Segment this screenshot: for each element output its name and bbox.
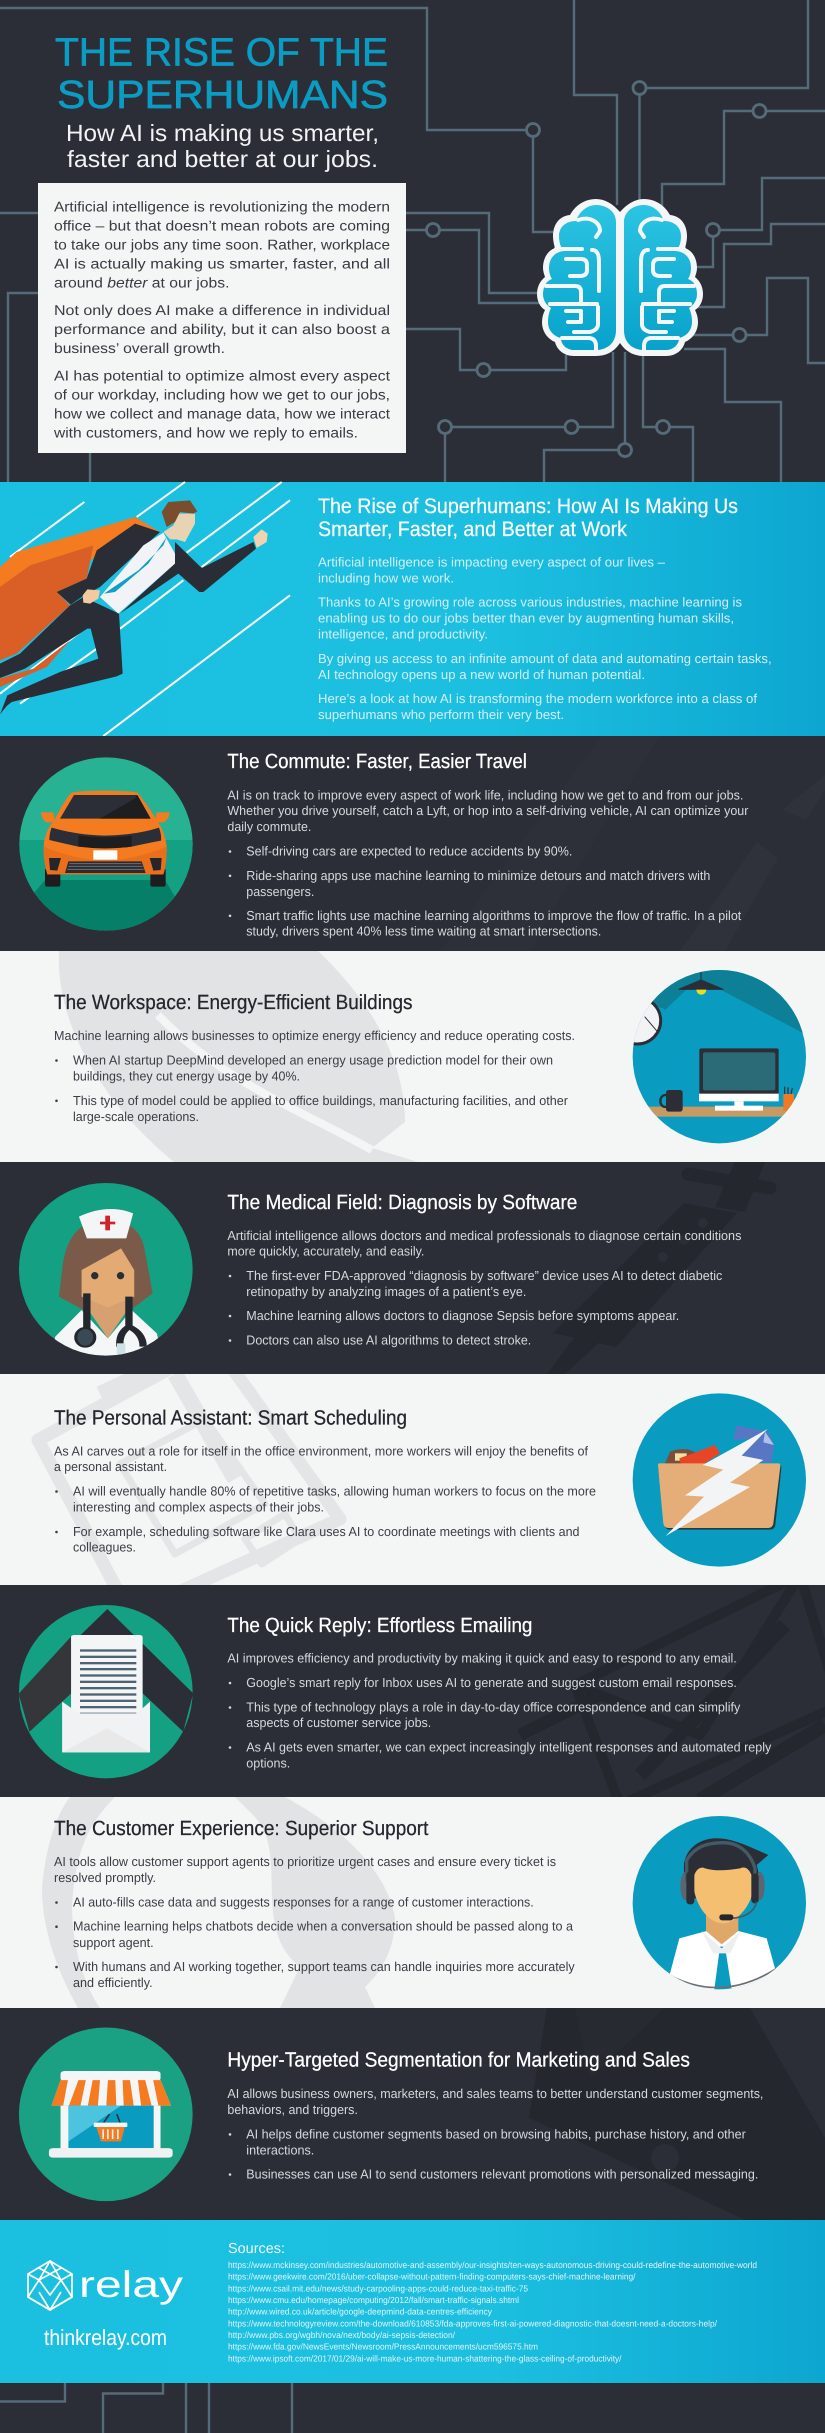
bullet list: AI helps define customer segments based on browsing habits, purchase history, and other [246,2126,746,2141]
body text: AI technology opens up a new world of human potential. [318,667,645,682]
bullet list [229,844,742,938]
body text: including how we work. [318,570,454,586]
title: THE RISE OF THE [55,30,388,74]
heading: Hyper-Targeted Segmentation for Marketing and Sales [227,2048,690,2072]
body text [227,2086,763,2117]
panel: hyper-targeted segmentation [0,2008,825,2220]
intro text panel: office – but that doesn’t mean robots are coming [54,218,390,234]
body text: AI tools allow customer support agents to prioritize urgent cases and ensure every ticket is [54,1854,556,1869]
bullet list: AI will eventually handle 80% of repetitive tasks, allowing human workers to focus on the more [73,1484,596,1498]
intro text panel: around better at our jobs. [54,276,229,292]
body text: AI improves efficiency and productivity by making it quick and easy to respond to any email. [227,1650,737,1666]
panel: the personal assistant [0,1329,825,1614]
bullet list [229,2126,758,2182]
website address: thinkrelay.com [44,2325,167,2350]
body text: As AI carves out a role for itself in the office environment, more workers will enjoy the benefits of [54,1444,588,1458]
bullet list: interesting and complex aspects of their jobs. [73,1500,324,1514]
circuit board traces [0,0,825,482]
sources list: https://www.ipsoft.com/2017/01/29/ai-will-make-us-more-human-shattering-the-glass-ceiling-of-productivity/ [228,2353,622,2363]
icon: brain [537,199,703,356]
subtitle: How AI is making us smarter, [66,120,379,146]
heading: The Customer Experience: Superior Support [54,1817,429,1840]
body text: By giving us access to an infinite amount of data and automating certain tasks, [318,651,772,666]
bullet list: options. [246,1756,290,1770]
heading [318,495,738,541]
bullet list: study, drivers spent 40% less time waiting at smart intersections. [246,924,601,938]
bullet list: As AI gets even smarter, we can expect increasingly intelligent responses and automated reply [246,1740,772,1754]
bullet list: When AI startup DeepMind developed an energy usage prediction model for their own [73,1052,553,1068]
icon: envelope with letter [19,1605,193,1778]
body text: resolved promptly. [54,1870,156,1885]
bullet list: AI auto-fills case data and suggests responses for a range of customer interactions. [73,1894,534,1910]
bullet list: Self-driving cars are expected to reduce accidents by 90%. [246,844,572,858]
heading: The Rise of Superhumans: How AI Is Making Us [318,495,738,518]
heading: Smarter, Faster, and Better at Work [318,518,627,541]
panel: the commute [19,736,748,938]
panel: the customer experience [0,1797,825,2008]
body text: Thanks to AI’s growing role across various industries, machine learning is [318,594,742,610]
bullet list: Doctors can also use AI algorithms to detect stroke. [246,1332,531,1348]
body text: intelligence, and productivity. [318,626,488,642]
bullet list: aspects of customer service jobs. [246,1715,431,1730]
logo: relay: relay [79,2264,184,2305]
bullet list: buildings, they cut energy usage by 40%. [73,1068,300,1084]
icon: office desk [632,970,806,1144]
bullet list: colleagues. [73,1540,136,1554]
heading: The Medical Field: Diagnosis by Software [227,1191,577,1214]
bullet list: Ride-sharing apps use machine learning to minimize detours and match drivers with [246,868,710,883]
bullet list [55,1894,575,1990]
bullet list: This type of model could be applied to office buildings, manufacturing facilities, and other [73,1093,569,1108]
bullet list [55,1484,596,1554]
panel: the medical field [18,1168,776,1356]
intro text panel: how we collect and manage data, how we interact [54,406,390,422]
bullet list: Smart traffic lights use machine learning algorithms to improve the flow of traffic. In a pilot [246,908,742,923]
illustration: flying superhero businessman [0,482,290,736]
bullet list: Machine learning allows doctors to diagnose Sepsis before symptoms appear. [246,1308,679,1323]
bullet list [55,1052,569,1124]
title [55,30,388,117]
bullet list: interactions. [246,2142,314,2157]
body text: enabling us to do our jobs better than ever by augmenting human skills, [318,610,734,626]
sources list: https://www.fda.gov/NewsEvents/Newsroom/PressAnnouncements/ucm596575.htm [228,2342,538,2352]
body text [54,1444,588,1474]
body text: more quickly, accurately, and easily. [227,1244,424,1258]
panel: the workspace [0,951,825,1162]
heading: The Quick Reply: Effortless Emailing [227,1614,532,1637]
intro text panel: Not only does AI make a difference in individual [54,303,390,319]
bullet list: For example, scheduling software like Clara uses AI to coordinate meetings with clients and [73,1524,580,1539]
body text: Artificial intelligence is impacting every aspect of our lives – [318,554,666,570]
bullet list: and efficiently. [73,1975,153,1990]
subtitle: faster and better at our jobs. [67,146,378,172]
intro text panel: of our workday, including how we get to our jobs, [54,388,390,404]
icon: folder with lightning bolt [633,1393,806,1567]
sources list: http://www.wired.co.uk/article/google-deepmind-data-centres-efficiency [228,2307,493,2317]
body text: Artificial intelligence allows doctors and medical professionals to diagnose certain conditions [227,1228,742,1243]
intro text panel: AI has potential to optimize almost every aspect [54,368,390,384]
sources heading: Sources: [228,2241,285,2257]
heading: The Workspace: Energy-Efficient Buildings [54,991,412,1014]
icon: storefront with basket [19,2027,193,2201]
bullet list: Machine learning helps chatbots decide when a conversation should be passed along to a [73,1919,574,1934]
bullet list: large-scale operations. [73,1109,199,1124]
panel: sources and logo [0,2220,825,2383]
bullet list: With humans and AI working together, support teams can handle inquiries more accurately [73,1959,575,1974]
sources list [228,2260,757,2363]
bullet list [229,1675,772,1770]
body text [227,788,749,834]
icon: nurse with stethoscope [19,1183,193,1360]
intro text panel: Artificial intelligence is revolutionizing the modern [54,200,390,216]
sources list: http://www.pbs.org/wgbh/nova/next/body/ai-sepsis-detection/ [228,2330,456,2340]
intro text panel: business’ overall growth. [54,341,225,357]
sources list: https://www.geekwire.com/2016/uber-collapse-without-pattern-finding-computers-says-chief-machine-learning/ [228,2272,636,2282]
body text: AI is on track to improve every aspect of work life, including how we get to and from our jobs. [227,788,743,802]
panel: hero [0,0,825,482]
intro text panel: performance and ability, but it can also boost a [54,322,390,338]
intro text panel [38,183,406,453]
body text: a personal assistant. [54,1459,167,1474]
heading: The Commute: Faster, Easier Travel [227,750,527,773]
sources list: https://www.cmu.edu/homepage/computing/2012/fall/smart-traffic-signals.shtml [228,2295,519,2305]
bullet list: Google’s smart reply for Inbox uses AI to generate and suggest custom email responses. [246,1675,737,1690]
body text: Machine learning allows businesses to optimize energy efficiency and reduce operating costs. [54,1028,575,1043]
body text [227,1228,742,1258]
sources list: https://www.technologyreview.com/the-download/610853/fda-approves-first-ai-powered-diagnostic-that-doesnt-need-a-doctors-help/ [228,2318,718,2328]
bullet list: support agent. [73,1935,154,1950]
logo: relay [28,2261,184,2310]
body text [54,1854,556,1885]
bullet list: This type of technology plays a role in day-to-day office correspondence and can simplify [246,1700,741,1714]
bullet list [229,1268,723,1348]
intro text panel: to take our jobs any time soon. Rather, workplace [54,238,390,254]
intro text panel: with customers, and how we reply to emails. [53,426,358,442]
body text: AI allows business owners, marketers, and sales teams to better understand customer segments, [227,2086,763,2101]
footer circuit traces [0,2383,292,2433]
icon: orange car [17,757,197,935]
title: SUPERHUMANS [57,73,388,117]
panel: the quick reply [0,1575,825,1805]
intro text panel: AI is actually making us smarter, faster, and all [54,256,390,272]
body text: Here’s a look at how AI is transforming the modern workforce into a class of [318,691,757,706]
heading: The Personal Assistant: Smart Scheduling [54,1406,407,1430]
body text: daily commute. [227,819,311,834]
panel: rise of superhumans [0,482,825,736]
sources list: https://www.mckinsey.com/industries/automotive-and-assembly/our-insights/ten-ways-autonomous-driving-could-redefine-the-automotive-world [228,2260,757,2270]
bullet list: retinopathy by analyzing images of a patient’s eye. [246,1284,526,1299]
bullet list: passengers. [246,884,314,899]
bullet list: The first-ever FDA-approved “diagnosis by software” device uses AI to detect diabetic [246,1268,723,1283]
bullet list: Businesses can use AI to send customers relevant promotions with personalized messaging. [246,2166,758,2182]
body text: superhumans who perform their very best. [318,707,564,722]
body text: behaviors, and triggers. [227,2102,358,2117]
body text [318,554,772,722]
body text: Whether you drive yourself, catch a Lyft, or hop into a self-driving vehicle, AI can optimize your [227,803,749,818]
sources list: https://www.csail.mit.edu/news/study-carpooling-apps-could-reduce-taxi-traffic-75 [228,2283,528,2293]
subtitle [66,120,379,172]
icon: customer support agent [633,1816,806,1992]
